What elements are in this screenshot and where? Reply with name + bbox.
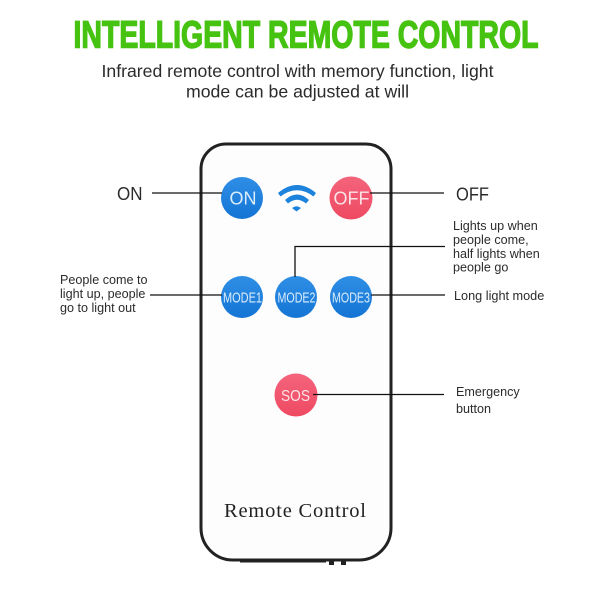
subtitle: Infrared remote control with memory function, light xyxy=(102,61,494,81)
label: mode 1 description: People come to xyxy=(60,273,148,287)
button: OFF xyxy=(330,176,372,220)
button: ON: ON xyxy=(230,188,256,208)
label: emergency button: Emergency xyxy=(456,385,520,399)
connector: MODE1 xyxy=(150,294,222,296)
label: OFF: OFF xyxy=(456,184,489,204)
remote control body xyxy=(201,144,391,565)
button: ON xyxy=(221,177,263,219)
icon: wifi signal xyxy=(278,185,316,212)
label: mode 2 description: people come, xyxy=(453,233,529,247)
button: MODE1: MODE1 xyxy=(223,290,262,306)
label: ON: ON xyxy=(117,184,142,204)
label: mode 2 description: half lights when xyxy=(453,247,540,261)
connector: SOS xyxy=(313,394,444,396)
button: OFF: OFF xyxy=(334,188,370,208)
label: mode 1 description: go to light out xyxy=(60,301,136,315)
connector: OFF xyxy=(370,192,444,194)
label: mode 2 description: Lights up when xyxy=(453,219,538,233)
label: mode 3 description: Long light mode xyxy=(454,289,544,303)
label: mode 1 description xyxy=(60,273,148,315)
label: emergency button: button xyxy=(456,402,491,416)
button: MODE3 xyxy=(330,276,372,318)
connector: MODE2 xyxy=(295,246,445,277)
subtitle xyxy=(102,61,494,102)
label: mode 1 description: light up, people xyxy=(60,287,145,301)
button: SOS: SOS xyxy=(281,388,310,405)
subtitle: mode can be adjusted at will xyxy=(186,82,409,102)
button: MODE1 xyxy=(221,276,263,318)
label: mode 2 description xyxy=(453,219,540,274)
label: emergency button xyxy=(456,385,520,416)
remote control label: Remote Control xyxy=(224,500,366,522)
label: mode 2 description: people go xyxy=(453,260,508,274)
button: SOS xyxy=(274,374,318,416)
button: MODE2: MODE2 xyxy=(278,290,316,306)
button: MODE2 xyxy=(275,276,317,318)
connector: ON xyxy=(152,192,222,194)
connector: MODE3 xyxy=(371,294,445,296)
button: MODE3: MODE3 xyxy=(332,290,370,306)
